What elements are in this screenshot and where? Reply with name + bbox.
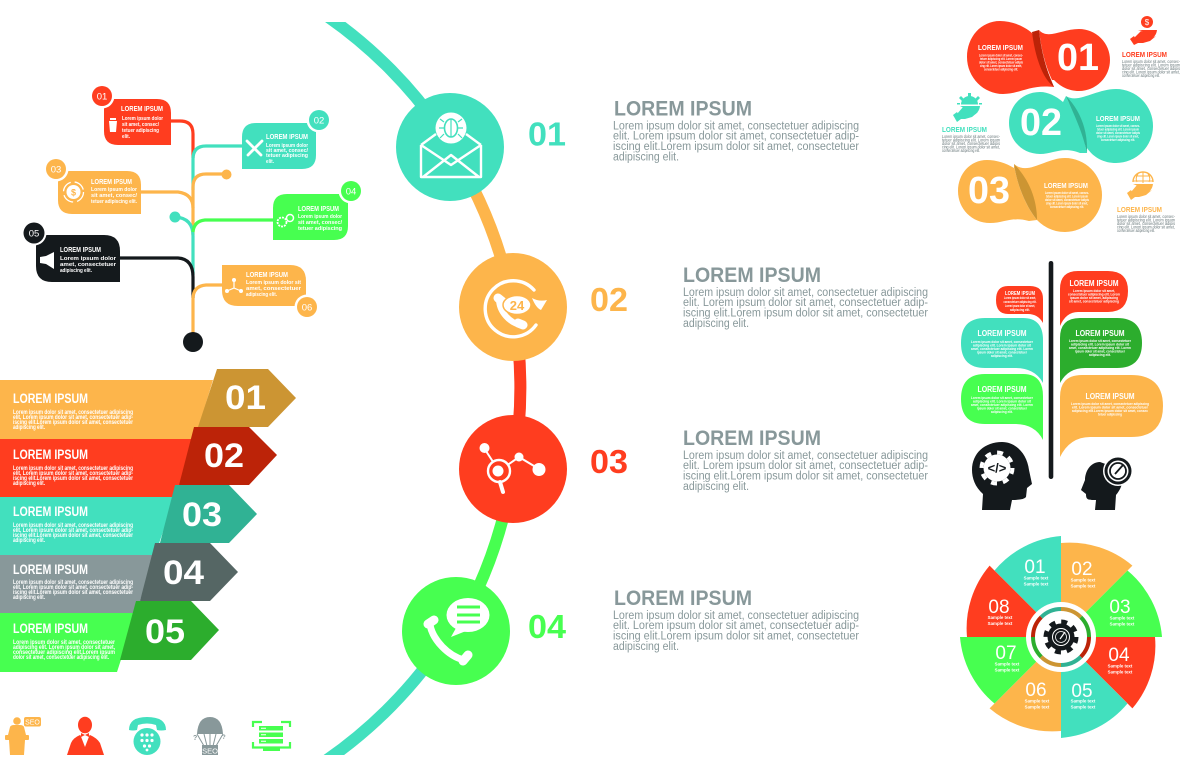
- red side text: Lorem ipsum dolor sit amet, consec-: [1122, 59, 1180, 64]
- bubble left 3 green: Lorem ipsum dolor sit amet, consectetuer: [971, 395, 1033, 400]
- wheel segment 01: Sample text: [1024, 582, 1049, 586]
- wave 02 teal: tetuer adipiscing elit. Lorem ipsum: [1097, 126, 1139, 132]
- wheel segment 04: 04: [1108, 645, 1130, 666]
- wheel segment 01: [994, 536, 1061, 637]
- icon: head with code gear: </>: [988, 460, 1007, 476]
- ribbon 03: elit. Lorem ipsum dolor sit amet, consectetuer adip-: [13, 527, 133, 534]
- bubble right 3 orange: adipiscing elit.Lorem ipsum dolor sit amet, consec: [1072, 408, 1149, 413]
- wave 03 orange: cing elit. Lorem ipsum dolor sit amet,: [1046, 200, 1088, 206]
- wave 01 red: dolor sit amet, consectetuer adipis: [979, 60, 1024, 64]
- wheel segment 08: Sample text: [988, 621, 1013, 626]
- ribbon 01: iscing elit.Lorem ipsum dolor sit amet, consectetuer: [13, 419, 133, 426]
- bubble right 1 red: ipsum dolor sit amet, adipiscing: [1070, 295, 1118, 300]
- panel: wave shapes: [942, 16, 1181, 233]
- tree card 04: sit amet, consec/: [298, 220, 343, 226]
- step 02 text block: Lorem ipsum dolor sit amet, consectetuer adipiscing: [683, 287, 928, 299]
- ribbon 04: LOREM IPSUM: [13, 562, 88, 577]
- wave 02 teal: consectetuer adipiscing elit.: [1101, 137, 1135, 142]
- step 02 number: 02: [590, 281, 628, 318]
- ribbon 02: elit. Lorem ipsum dolor sit amet, consectetuer adip-: [13, 470, 133, 477]
- wave 03 orange: 03: [968, 170, 1010, 212]
- step 02 text block: iscing elit.Lorem ipsum dolor sit amet, consectetuer: [683, 308, 928, 320]
- wheel segment 07: 07: [995, 643, 1017, 664]
- bubble right 2 dark green: Lorem ipsum dolor sit amet, consectetuer: [1069, 338, 1131, 343]
- tree card 05: adipiscing elit.: [60, 268, 92, 274]
- wheel segment 02: Sample text: [1071, 578, 1096, 582]
- bubble left 2 teal: amet, consectetuer adipiscing elit. Lorem: [971, 346, 1033, 351]
- icon: hand with gear: [953, 93, 982, 122]
- wheel segment 07: [960, 637, 1061, 704]
- step 03 text block: Lorem ipsum dolor sit amet, consectetuer adipiscing: [683, 450, 928, 462]
- tree card 03: LOREM IPSUM: [91, 179, 132, 186]
- wave 02 teal: Lorem ipsum dolor sit amet, consec-: [1096, 123, 1140, 128]
- wheel segment 02: [1061, 543, 1132, 637]
- teal side text: Lorem ipsum dolor sit amet, consec-: [942, 134, 1000, 139]
- ribbon 05: [0, 601, 219, 672]
- red side text: consectetuer adipiscing elit.: [1122, 73, 1160, 78]
- tree card 06: 06: [302, 302, 312, 314]
- wheel hub: [1026, 602, 1096, 672]
- wheel segment 07: Sample text: [995, 662, 1020, 666]
- wave 02 teal: cing elit. Lorem ipsum dolor sit amet,: [1097, 134, 1139, 138]
- ribbon 03: LOREM IPSUM: [13, 504, 88, 519]
- wave 01 red: cing elit. Lorem ipsum dolor sit amet,: [980, 63, 1022, 68]
- tree card 05: Lorem ipsum dolor: [60, 256, 116, 262]
- wheel segment 07: Sample text: [995, 668, 1020, 672]
- wave 01 red: 01: [1057, 37, 1099, 79]
- step 02 text block: LOREM IPSUM: [683, 264, 821, 287]
- ribbon 04: iscing elit.Lorem ipsum dolor sit amet, consectetuer: [13, 589, 133, 596]
- teal side text: consectetuer adipiscing elit.: [942, 148, 980, 153]
- step 02: 24 hour phone icon: 24: [510, 298, 525, 313]
- central timeline arc: [315, 8, 520, 765]
- step 03 number: 03: [590, 443, 628, 480]
- tree card 06: Lorem ipsum dolor sit: [246, 280, 301, 286]
- icon: SEO parachute: [193, 717, 226, 756]
- orange side text: tetuer adipiscing elit. Lorem ipsum: [1117, 218, 1175, 222]
- icon: SEO parachute: ?: [193, 735, 197, 742]
- wave 01 red: [967, 21, 1110, 94]
- wheel segment 05: Sample text: [1071, 698, 1096, 704]
- icon: hand with globe: [1127, 172, 1153, 200]
- tree card 02: 02: [314, 116, 324, 126]
- panel: speech bubbles and heads: [961, 261, 1163, 510]
- tree card 06: [222, 265, 320, 320]
- ribbon 05: LOREM IPSUM: [13, 621, 88, 636]
- teal side text: tetuer adipiscing elit. Lorem ipsum: [942, 138, 1000, 142]
- tree card 01: tetuer adipiscing: [122, 128, 159, 134]
- tree card 02: [242, 108, 332, 169]
- tree card 01: 01: [97, 92, 107, 102]
- tree card 01: elit.: [122, 134, 130, 140]
- bubble left 3 green: adipiscing elit.: [991, 409, 1013, 414]
- wheel segment 04: [1061, 637, 1155, 708]
- step 01 text block: [613, 98, 859, 164]
- step 03 text block: elit. Lorem ipsum dolor sit amet, consectetuer adip-: [683, 460, 928, 472]
- step 04 text block: LOREM IPSUM: [614, 587, 752, 610]
- ribbon 05: adipiscing elit. Lorem ipsum dolor sit amet,: [13, 644, 115, 651]
- step 03 text block: iscing elit.Lorem ipsum dolor sit amet, consectetuer: [683, 470, 928, 482]
- ribbon 01: adipiscing elit.: [13, 424, 45, 431]
- bubble right 1 red: Lorem ipsum dolor sit amet,: [1073, 288, 1115, 293]
- step 03 text block: [683, 427, 928, 493]
- wheel segment 02: Sample text: [1071, 584, 1096, 588]
- step 01 text block: iscing elit.Lorem ipsum dolor sit amet, consectetuer: [613, 141, 859, 153]
- orange side text: LOREM IPSUM: [1117, 205, 1162, 214]
- tree card 02: LOREM IPSUM: [266, 134, 308, 141]
- tree card 05: amet, consectetuer: [60, 262, 116, 268]
- icon: SEO speaker at podium: [5, 717, 41, 755]
- icon: SEO speaker at podium: SEO: [25, 720, 40, 726]
- tree card 02: Lorem ipsum dolor: [266, 143, 308, 149]
- step 01 text block: adipiscing elit.: [613, 152, 679, 164]
- bubble right 3 orange: tetuer adipiscing: [1098, 412, 1122, 416]
- bubble right 1 red: sit amet, consectetuer adipiscing: [1069, 298, 1119, 304]
- teal side text: dolor sit amet, consectetuer adipis: [942, 141, 1001, 146]
- bubble left 2 teal: ipsum dolor sit amet, consectetuer: [977, 350, 1027, 354]
- ribbon 03: iscing elit.Lorem ipsum dolor sit amet, consectetuer: [13, 532, 133, 539]
- red side text: dolor sit amet, consectetuer adipis: [1122, 66, 1181, 71]
- tree card 04: [273, 178, 364, 240]
- step 04 text block: elit. Lorem ipsum dolor sit amet, consectetuer adip-: [613, 620, 859, 632]
- bubble right 3 orange: [1060, 375, 1163, 457]
- step 01 text block: elit. Lorem ipsum dolor sit amet, consectetuer adip-: [613, 130, 859, 142]
- wave 02 teal: dolor sit amet, consectetuer adipis: [1096, 130, 1141, 135]
- ribbon 04: Lorem ipsum dolor sit amet, consectetuer adipiscing: [13, 579, 133, 586]
- wave 02 teal: [1009, 89, 1153, 163]
- ribbon 01: 01: [225, 379, 266, 417]
- wave 03 orange: [958, 158, 1102, 232]
- red side text: LOREM IPSUM: [1122, 50, 1167, 59]
- bubble left 2 teal: LOREM IPSUM: [978, 329, 1027, 338]
- step 01: email bug icon: [396, 93, 504, 201]
- step 01 number: 01: [528, 116, 566, 152]
- ribbon 03: adipiscing elit.: [13, 537, 45, 544]
- tree card 06: amet, consectetuer: [246, 286, 301, 292]
- ribbon 03: 03: [182, 496, 222, 534]
- step 04 text block: adipiscing elit.: [613, 641, 679, 653]
- wave 01 red: LOREM IPSUM: [978, 45, 1023, 52]
- bubble right 3 orange: Lorem ipsum dolor sit amet, consectetuer adipiscing: [1071, 401, 1149, 406]
- wave 01 red: tetuer adipiscing elit. Lorem ipsum: [980, 56, 1022, 61]
- icon: server rack: [253, 722, 290, 751]
- ribbon 04: [0, 543, 238, 613]
- wheel segment 03: Sample text: [1110, 616, 1135, 620]
- wheel segment 03: [1061, 570, 1162, 637]
- wave 03 orange: LOREM IPSUM: [1044, 183, 1088, 190]
- ribbon 05: consectetuer adipiscing elit.Lorem ipsum: [13, 649, 115, 656]
- ribbon 01: elit. Lorem ipsum dolor sit amet, consectetuer adip-: [13, 414, 133, 421]
- icon: rotary telephone: [129, 717, 166, 755]
- wave 01 red: Lorem ipsum dolor sit amet, consec-: [979, 52, 1023, 58]
- orange side text: Lorem ipsum dolor sit amet, consec-: [1117, 214, 1175, 219]
- red side text: cing elit. Lorem ipsum dolor sit amet,: [1122, 70, 1180, 74]
- ribbon 03: Lorem ipsum dolor sit amet, consectetuer adipiscing: [13, 522, 133, 529]
- bubble left 2 teal: adipiscing elit.: [991, 353, 1013, 358]
- bubble left 3 green: amet, consectetuer adipiscing elit. Lorem: [971, 402, 1033, 407]
- tree card 02: elit.: [266, 159, 274, 165]
- wheel segment 01: 01: [1024, 557, 1046, 578]
- icon: SEO parachute: ?: [222, 735, 226, 741]
- tree card 02: sit amet, consec/: [266, 148, 309, 154]
- tree card 03: Lorem ipsum dolor: [91, 187, 137, 193]
- wheel segment 06: 06: [1025, 680, 1047, 701]
- wheel segment 06: Sample text: [1025, 704, 1050, 710]
- step 02 text block: [683, 264, 928, 330]
- orange side text: [1117, 205, 1176, 233]
- step 03 text block: adipiscing elit.: [683, 481, 749, 493]
- wave 03 orange: Lorem ipsum dolor sit amet, consec-: [1045, 190, 1089, 195]
- ribbon 03: [0, 485, 257, 555]
- ribbon 02: LOREM IPSUM: [13, 447, 88, 462]
- panel: tree diagram: [22, 84, 364, 352]
- tree card 06: LOREM IPSUM: [246, 272, 288, 279]
- wheel segment 08: Sample text: [988, 615, 1013, 620]
- wave 02 teal: 02: [1020, 102, 1062, 144]
- ribbon 04: adipiscing elit.: [13, 594, 45, 601]
- wheel segment 03: Sample text: [1110, 622, 1135, 626]
- step 02: 24 hour phone icon: [459, 253, 567, 361]
- ribbon 05: 05: [145, 613, 185, 651]
- icon: hand with dollar coin: $: [1145, 18, 1150, 27]
- tree card 04: Lorem ipsum dolor: [298, 214, 342, 220]
- bubble left 1 red: [996, 286, 1043, 323]
- ribbon 04: elit. Lorem ipsum dolor sit amet, consectetuer adip-: [13, 584, 133, 591]
- wave 01 red: consectetuer adipiscing elit.: [984, 66, 1018, 72]
- bubble left 3 green: adipiscing elit. Lorem ipsum dolor sit: [973, 398, 1032, 404]
- bubble right 2 dark green: adipiscing elit. Lorem ipsum dolor sit: [1071, 342, 1130, 346]
- bubble right 1 red: LOREM IPSUM: [1070, 279, 1119, 288]
- tree card 05: 05: [29, 228, 39, 240]
- tree card 05: LOREM IPSUM: [60, 247, 101, 254]
- teal side text: LOREM IPSUM: [942, 125, 987, 134]
- wave 02 teal: LOREM IPSUM: [1096, 116, 1140, 123]
- red side text: tetuer adipiscing elit. Lorem ipsum: [1122, 62, 1180, 68]
- wheel segment 05: [1061, 637, 1128, 738]
- bubble left 1 red: consectetuer adipiscing elit.: [1004, 299, 1036, 304]
- step 04 number: 04: [528, 608, 567, 645]
- panel: segmented wheel: [960, 536, 1162, 738]
- ribbon 04: 04: [163, 554, 204, 592]
- red side text: [1122, 50, 1181, 78]
- bubble right 2 dark green: ipsum dolor sit amet, consectetuer: [1075, 348, 1125, 354]
- bubble right 1 red: [1060, 271, 1128, 326]
- bubble right 2 dark green: adipiscing elit.: [1089, 352, 1111, 357]
- tree card 04: LOREM IPSUM: [298, 206, 339, 213]
- wheel segment 04: Sample text: [1108, 664, 1133, 668]
- ribbon 02: adipiscing elit.: [13, 480, 45, 487]
- bubble left 1 red: Lorem ipsum dolor sit amet,: [1004, 295, 1036, 300]
- wheel segment 08: 08: [988, 597, 1010, 618]
- tree branches: [120, 121, 273, 352]
- ribbon 01: LOREM IPSUM: [13, 391, 88, 406]
- bubble right 1 red: consectetuer adipiscing elit. Lorem: [1068, 292, 1120, 296]
- wave 03 orange: consectetuer adipiscing elit.: [1050, 204, 1084, 209]
- wheel segment 02: 02: [1071, 559, 1093, 580]
- tree card 03: sit amet, consec/: [91, 193, 138, 199]
- tree card 02: tetuer adipiscing: [266, 153, 308, 159]
- bubble left 2 teal: [961, 318, 1043, 383]
- teal side text: cing elit. Lorem ipsum dolor sit amet,: [942, 144, 1000, 150]
- tree card 03: 03: [51, 164, 61, 176]
- ribbon 05: dolor sit amet, consectetuer adipiscing elit.: [13, 654, 109, 661]
- ribbon 02: 02: [204, 437, 244, 475]
- wheel segment 05: 05: [1071, 681, 1093, 702]
- bubble right 3 orange: elit. Lorem ipsum dolor sit amet, consectetuer: [1072, 404, 1148, 410]
- wheel segment 08: [967, 566, 1061, 637]
- teal side text: [942, 125, 1001, 153]
- tree card 01: [90, 84, 171, 145]
- bubble left 1 red: adipiscing elit.: [1010, 307, 1030, 312]
- step 02 text block: elit. Lorem ipsum dolor sit amet, consectetuer adip-: [683, 297, 928, 309]
- bubble left 1 red: Lorem ipsum dolor sit amet,: [1005, 303, 1035, 308]
- tree card 04: 04: [346, 186, 356, 198]
- tree card 03: [44, 156, 141, 214]
- step 01 text block: LOREM IPSUM: [614, 98, 752, 120]
- icon: businessman: [67, 717, 104, 755]
- ribbon 01: [0, 369, 296, 439]
- wave 03 orange: dolor sit amet, consectetuer adipis: [1045, 197, 1090, 202]
- tree card 01: sit amet, consec/: [122, 122, 159, 128]
- ribbon 02: iscing elit.Lorem ipsum dolor sit amet, consectetuer: [13, 475, 133, 482]
- tree card 01: Lorem ipsum dolor: [122, 116, 163, 122]
- ribbon 02: [0, 427, 277, 497]
- wheel segment 03: 03: [1109, 597, 1131, 618]
- bubble left 3 green: [961, 374, 1043, 440]
- bubble right 2 dark green: LOREM IPSUM: [1076, 329, 1125, 338]
- step 04 text block: iscing elit.Lorem ipsum dolor sit amet, consectetuer: [613, 630, 859, 642]
- wheel segment 06: Sample text: [1025, 698, 1050, 704]
- icon: head with code gear: [972, 442, 1032, 510]
- bubble left 3 green: LOREM IPSUM: [978, 385, 1027, 394]
- orange side text: consectetuer adipiscing elit.: [1117, 228, 1155, 233]
- ribbon 02: Lorem ipsum dolor sit amet, consectetuer adipiscing: [13, 465, 133, 472]
- wheel segment 06: [990, 637, 1061, 731]
- bubble left 1 red: LOREM IPSUM: [1005, 291, 1035, 297]
- bubble right 3 orange: LOREM IPSUM: [1086, 392, 1135, 401]
- bubble right 2 dark green: [1060, 318, 1142, 383]
- step 01 text block: Lorem ipsum dolor sit amet, consectetuer adipiscing: [613, 120, 859, 132]
- ribbon 01: Lorem ipsum dolor sit amet, consectetuer adipiscing: [13, 409, 133, 416]
- icon: head with gauge: [1081, 456, 1133, 510]
- icon: hand with dollar coin: [1130, 16, 1157, 45]
- tree card 03: $: [71, 188, 76, 198]
- wheel segment 01: Sample text: [1024, 576, 1049, 580]
- wave 03 orange: tetuer adipiscing elit. Lorem ipsum: [1046, 194, 1088, 198]
- panel: ribbon list: [0, 369, 296, 672]
- step 02 text block: adipiscing elit.: [683, 318, 749, 330]
- tree card 06: adipiscing elit.: [246, 292, 277, 298]
- wheel segment 05: Sample text: [1071, 704, 1096, 710]
- ribbon 05: Lorem ipsum dolor sit amet, consectetuer: [13, 639, 115, 646]
- tree card 01: LOREM IPSUM: [121, 106, 163, 113]
- bubble left 3 green: ipsum dolor sit amet, consectetuer: [977, 406, 1027, 410]
- icon: SEO parachute: SEO: [202, 746, 218, 756]
- divider bar: [1049, 261, 1053, 479]
- step 04 text block: Lorem ipsum dolor sit amet, consectetuer adipiscing: [613, 610, 859, 622]
- tree card 04: tetuer adipiscing: [298, 226, 342, 232]
- step 04 text block: [613, 587, 859, 653]
- orange side text: cing elit. Lorem ipsum dolor sit amet,: [1117, 224, 1175, 230]
- orange side text: dolor sit amet, consectetuer adipis: [1117, 221, 1176, 226]
- bubble right 2 dark green: amet, consectetuer adipiscing elit. Lorem: [1069, 345, 1131, 350]
- tree card 05: [22, 220, 120, 282]
- tree card 03: tetuer adipiscing elit.: [91, 199, 137, 205]
- bubble left 2 teal: adipiscing elit. Lorem ipsum dolor sit: [973, 342, 1032, 348]
- wheel segment 04: Sample text: [1108, 670, 1133, 674]
- step 03 text block: LOREM IPSUM: [683, 427, 821, 450]
- step 04: phone chat icon: [402, 577, 510, 685]
- bubble left 2 teal: Lorem ipsum dolor sit amet, consectetuer: [971, 339, 1033, 344]
- step 03: network search icon: [459, 415, 567, 523]
